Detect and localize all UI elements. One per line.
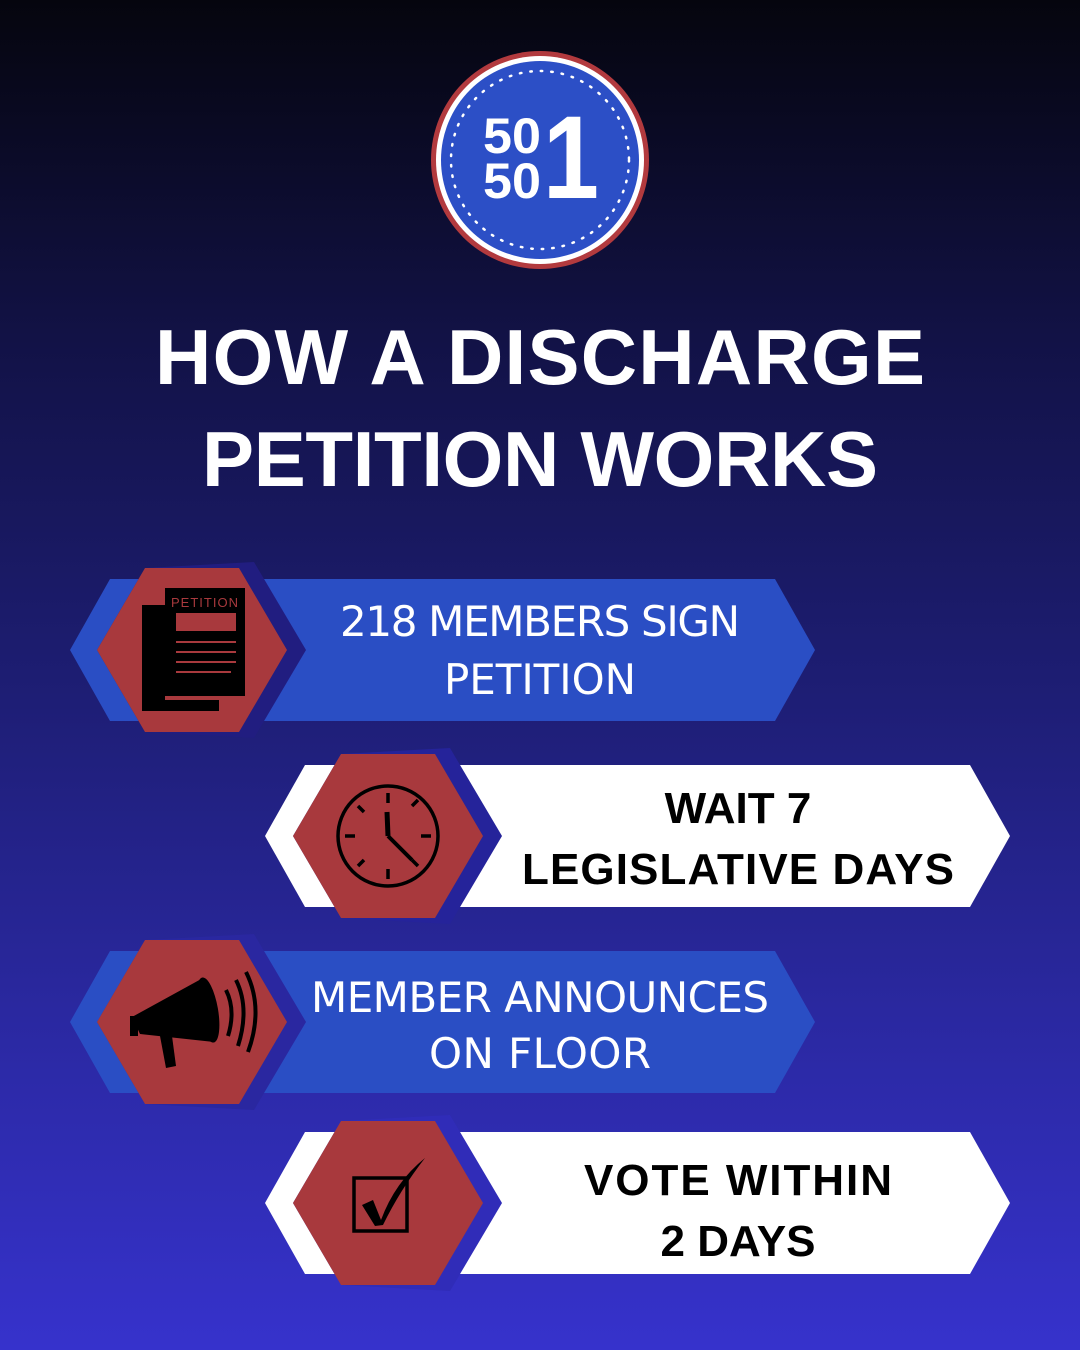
- step 4: vote within 2 days: [265, 1115, 1010, 1291]
- step 1: 218 members sign petition: 218 MEMBERS SIGN: [340, 597, 740, 646]
- step 4: vote within 2 days: 2 DAYS: [661, 1217, 815, 1266]
- title: PETITION WORKS: [202, 415, 878, 503]
- icon: megaphone: [130, 972, 256, 1068]
- step 3: member announces on floor: MEMBER ANNOUNCES: [311, 973, 769, 1022]
- title: [155, 313, 925, 503]
- logo: [431, 51, 649, 269]
- icon: checkbox: [354, 1158, 425, 1231]
- logo: 1: [543, 92, 599, 224]
- step 3: member announces on floor: [70, 934, 815, 1110]
- step 3: member announces on floor: ON FLOOR: [429, 1029, 651, 1078]
- step 2: wait 7 legislative days: WAIT 7: [665, 784, 811, 833]
- logo: 50: [483, 108, 541, 164]
- title: HOW A DISCHARGE: [155, 313, 925, 401]
- step 2: wait 7 legislative days: LEGISLATIVE DAYS: [522, 845, 954, 894]
- step 1: 218 members sign petition: PETITION: [444, 655, 636, 704]
- step 2: wait 7 legislative days: [265, 748, 1010, 924]
- logo: 50: [483, 153, 541, 209]
- step 1: 218 members sign petition: [70, 562, 815, 738]
- icon: petition document: [142, 588, 245, 711]
- step 4: vote within 2 days: VOTE WITHIN: [584, 1156, 892, 1205]
- icon: clock: [338, 786, 438, 886]
- icon: petition document: PETITION: [171, 595, 239, 610]
